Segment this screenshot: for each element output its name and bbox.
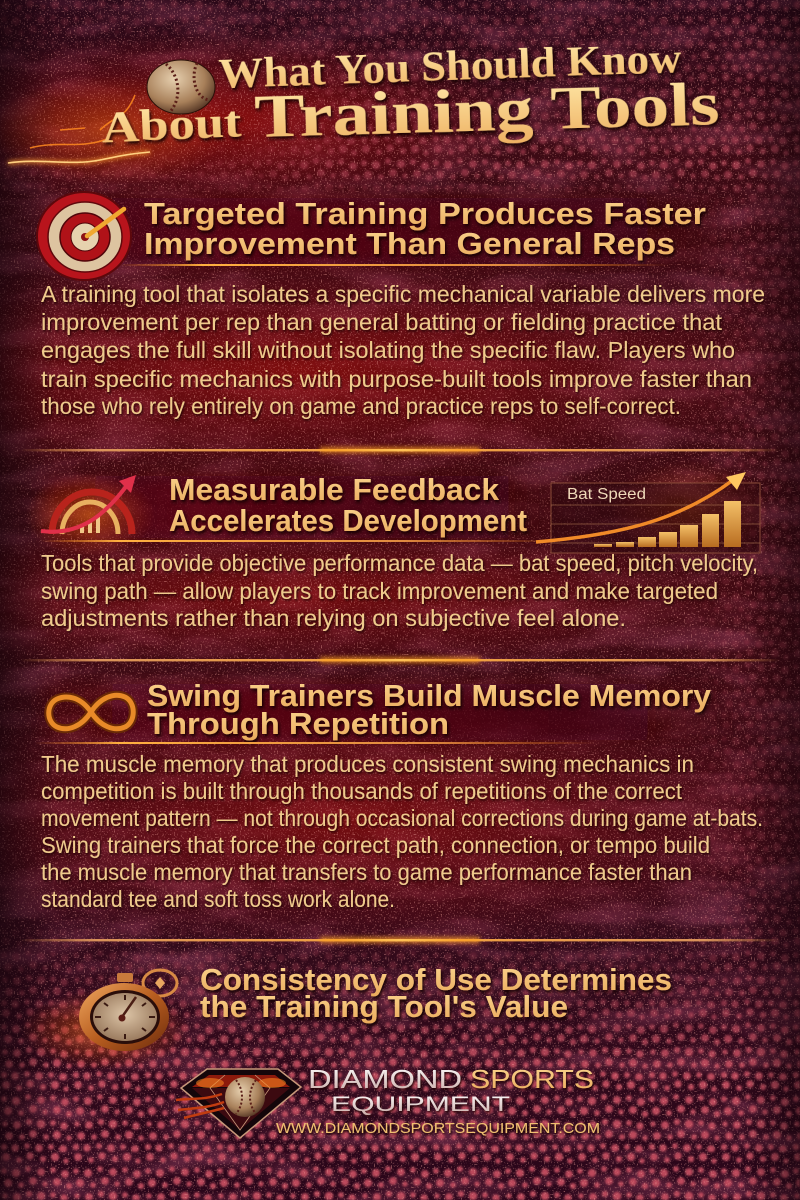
- body text: the muscle memory that transfers to game performance faster than: [41, 859, 692, 885]
- title: About: [100, 97, 243, 152]
- bars: [594, 501, 741, 547]
- heading: Accelerates Development: [169, 503, 527, 538]
- title spark streaks: [0, 75, 230, 185]
- heading: the Training Tool's Value: [200, 989, 568, 1024]
- heading: [144, 196, 706, 261]
- heading: Swing Trainers Build Muscle Memory: [147, 678, 712, 713]
- heading: Through Repetition: [147, 706, 449, 741]
- chart: bat speed: [536, 460, 770, 560]
- company name: [308, 1064, 594, 1116]
- company name: SPORTS: [470, 1064, 594, 1094]
- heading: Targeted Training Produces Faster: [144, 196, 706, 231]
- title: Training Tools: [254, 71, 720, 151]
- body text: Swing trainers that force the correct path, connection, or tempo build: [41, 832, 710, 858]
- body text: adjustments rather than relying on subjective feel alone.: [41, 605, 626, 631]
- heading: Consistency of Use Determines: [200, 962, 672, 997]
- panel: targeted training: [37, 192, 765, 419]
- logo: diamond sports equipment: [176, 1064, 600, 1138]
- heading: Improvement Than General Reps: [144, 226, 675, 261]
- company name: EQUIPMENT: [331, 1093, 510, 1116]
- website: WWW.DIAMONDSPORTSEQUIPMENT.COM: [276, 1120, 600, 1137]
- heading: [200, 962, 672, 1024]
- icon: target with dart: [37, 192, 131, 280]
- icon: baseball: [147, 60, 215, 114]
- icon: growth arches and arrow: [25, 473, 155, 557]
- body text: [41, 751, 763, 912]
- body text: A training tool that isolates a specific mechanical variable delivers more: [41, 281, 765, 307]
- body text: those who rely entirely on game and practice reps to self-correct.: [41, 393, 681, 419]
- arrow: [536, 472, 746, 542]
- body text: competition is built through thousands of repetitions of the correct: [41, 778, 683, 804]
- body text: standard tee and soft toss work alone.: [41, 886, 395, 912]
- company name: DIAMOND: [308, 1064, 462, 1094]
- icon: infinity loop: [49, 695, 133, 729]
- panel: swing trainers: [35, 678, 763, 912]
- panel: consistency: [20, 962, 672, 1070]
- body text: [41, 281, 765, 419]
- body text: swing path — allow players to track improvement and make targeted: [41, 578, 718, 604]
- body text: [41, 550, 758, 631]
- body text: Tools that provide objective performance data — bat speed, pitch velocity,: [41, 550, 758, 576]
- heading: Measurable Feedback: [169, 472, 500, 507]
- title: What You Should Know: [218, 36, 683, 98]
- body text: The muscle memory that produces consistent swing mechanics in: [41, 751, 694, 777]
- body text: train specific mechanics with purpose-built tools improve faster than: [41, 366, 752, 392]
- heading: [147, 678, 712, 741]
- panel: measurable feedback: [25, 460, 770, 631]
- icon: stopwatch: [20, 970, 190, 1070]
- chart label: Bat Speed: [567, 486, 646, 503]
- title: [0, 36, 720, 185]
- body text: improvement per rep than general batting or fielding practice that: [41, 309, 723, 335]
- heading: [169, 472, 527, 538]
- logo emblem: [176, 1069, 301, 1138]
- body text: engages the full skill without isolating the specific flaw. Players who: [41, 337, 735, 363]
